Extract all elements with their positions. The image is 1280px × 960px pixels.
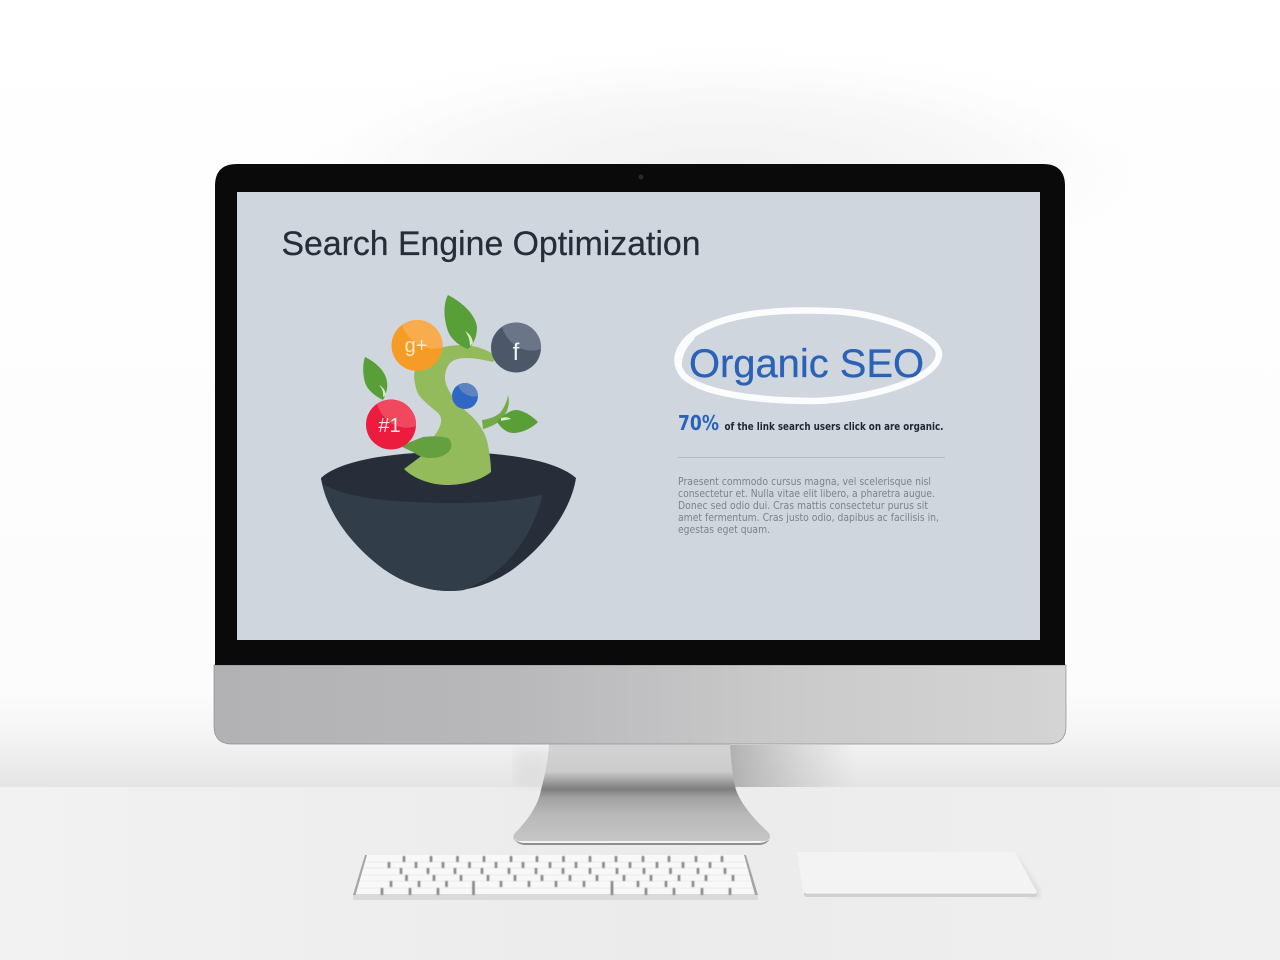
bowl — [321, 452, 576, 591]
trackpad — [797, 852, 1040, 898]
body paragraph: Praesent commodo cursus magna, vel scelerisque nisl — [678, 475, 931, 488]
keyboard — [353, 855, 758, 900]
webcam — [638, 174, 644, 180]
statistic: 70%: 70% — [678, 411, 719, 435]
body paragraph: Donec sed odio dui. Cras mattis consectetur purus sit — [678, 499, 929, 512]
body paragraph: consectetur et. Nulla vitae elit libero, a pharetra augue. — [678, 487, 935, 500]
badge: f — [491, 322, 541, 372]
heading: Organic SEO — [689, 342, 924, 386]
organic SEO callout — [677, 311, 939, 401]
slide title: Search Engine Optimization — [282, 225, 700, 263]
statistic: 70% — [678, 411, 944, 435]
badge: g+: g+ — [405, 335, 427, 357]
monitor stand — [513, 744, 770, 845]
hand-drawn circle — [677, 311, 939, 401]
badge: blue dot — [452, 383, 478, 409]
monitor — [214, 164, 1066, 744]
monitor bezel — [215, 164, 1065, 665]
badge: g+ — [392, 320, 442, 371]
badge: #1 — [366, 400, 416, 450]
body paragraph: egestas eget quam. — [678, 523, 770, 536]
statistic: 70%: of the link search users click on are organic. — [724, 421, 944, 433]
leaves — [363, 295, 538, 433]
badge: f: f — [513, 339, 520, 366]
screen — [237, 192, 1040, 640]
body paragraph: amet fermentum. Cras justo odio, dapibus ac facilisis in, — [678, 511, 939, 524]
monitor chin — [214, 665, 1066, 744]
plant stem — [400, 345, 509, 485]
body paragraph — [678, 475, 939, 536]
badge: #1: #1 — [378, 415, 401, 437]
illustration: plant growing in a bowl — [321, 295, 576, 591]
